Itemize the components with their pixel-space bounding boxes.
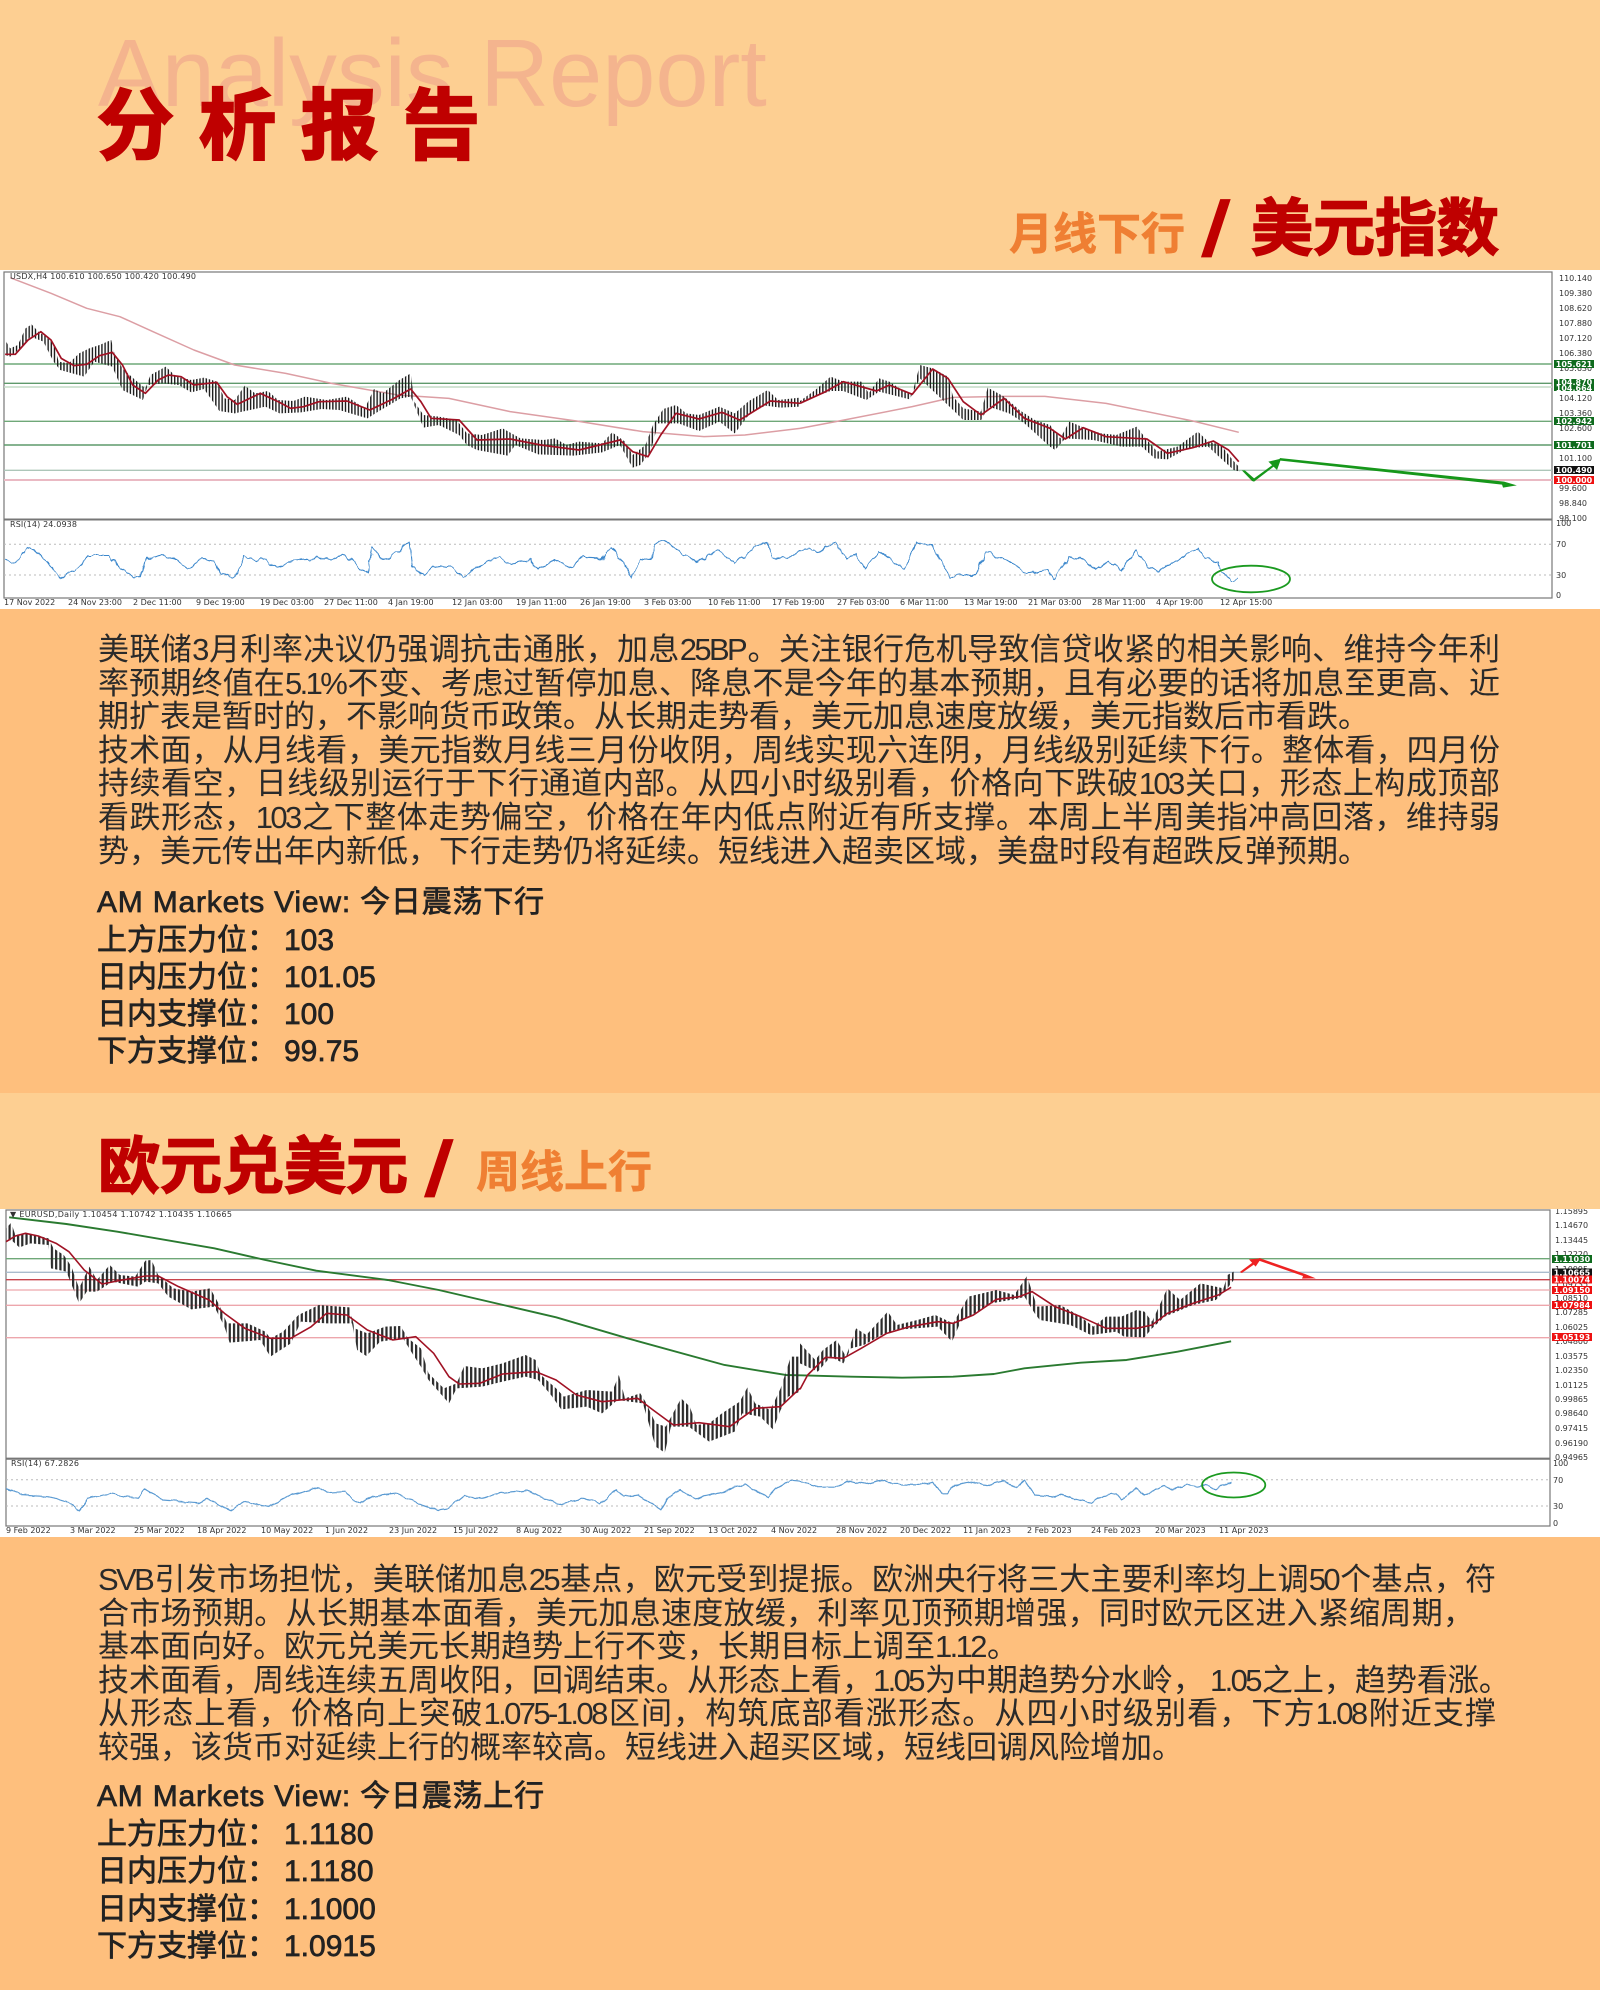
long moving average (9, 1217, 1231, 1378)
price axis labels: 100 (1553, 1459, 1568, 1468)
text block: USD index analysis: 持续看空，日线级别运行于下行通道内部。从四小时级别看，价格向下跌破103关口，形态上构成顶部 (98, 758, 1500, 803)
key levels: USD index: 99.75 (284, 1035, 359, 1068)
price axis labels: 70 (1556, 540, 1566, 549)
text block: EUR/USD analysis: 较强，该货币对延续上行的概率较高。短线进入超买区域，短线回调风险增加。 (98, 1722, 1183, 1767)
price axis labels: 98.840 (1559, 499, 1587, 508)
time axis labels: 10 May 2022 (261, 1526, 313, 1535)
price axis labels: 30 (1553, 1502, 1563, 1511)
time axis labels: 4 Nov 2022 (771, 1526, 817, 1535)
price axis labels: 105.630 (1559, 364, 1592, 373)
chart labels (10, 272, 196, 529)
time axis labels: 8 Aug 2022 (516, 1526, 562, 1535)
green ellipse highlight (1202, 1472, 1265, 1498)
price tags: 104.870 (1556, 378, 1593, 387)
text block: USD index analysis: 美联储3月利率决议仍强调抗击通胀，加息25BP。关注银行危机导致信贷收紧的相关影响、维持今年利 (98, 624, 1500, 669)
support and resistance lines (4, 364, 1552, 480)
chart labels: RSI(14) 24.0938 (10, 520, 77, 529)
time axis labels: 24 Nov 23:00 (68, 598, 122, 607)
price axis labels: 1.12220 (1555, 1250, 1588, 1259)
chart: EURUSD Daily (0, 1209, 1600, 1537)
key levels: USD index: 日内压力位： (97, 961, 277, 994)
long moving average (10, 278, 1239, 437)
price axis labels: 1.01125 (1555, 1381, 1588, 1390)
key levels: EUR/USD: 下方支撑位： (97, 1930, 277, 1962)
time axis labels: 17 Feb 19:00 (772, 598, 824, 607)
key levels: USD index (96, 886, 545, 1068)
price axis labels: 1.07285 (1555, 1308, 1588, 1317)
price tags: 1.07984 (1554, 1301, 1591, 1310)
time axis labels: 27 Dec 11:00 (324, 598, 378, 607)
time axis labels: 9 Dec 19:00 (196, 598, 245, 607)
short moving average (6, 1233, 1231, 1427)
candlesticks (6, 1223, 1234, 1453)
price axis labels: 100 (1556, 519, 1571, 528)
forecast arrows: green (1242, 458, 1517, 488)
key levels: EUR/USD: AM Markets View: 今日震荡上行 (97, 1780, 545, 1813)
price axis labels: 70 (1553, 1476, 1563, 1485)
price axis labels: 107.120 (1559, 334, 1592, 343)
price tags: 1.10074 (1554, 1276, 1591, 1284)
time axis labels: 21 Mar 03:00 (1028, 598, 1081, 607)
price tags (1552, 1255, 1592, 1342)
price tags: 1.10665 (1554, 1268, 1591, 1278)
time axis labels: 6 Mar 11:00 (900, 598, 948, 607)
price axis labels: 109.380 (1559, 289, 1592, 298)
time axis labels: 24 Feb 2023 (1091, 1526, 1141, 1535)
text block: USD index analysis (98, 624, 1500, 871)
price axis labels: 1.03575 (1555, 1352, 1588, 1361)
key levels: EUR/USD (96, 1780, 545, 1962)
time axis labels: 12 Apr 15:00 (1220, 598, 1272, 607)
key levels: EUR/USD: 日内压力位： (97, 1855, 277, 1888)
price axis labels: 99.600 (1559, 484, 1587, 493)
time axis labels: 23 Jun 2022 (389, 1526, 437, 1535)
time axis labels: 9 Feb 2022 (6, 1526, 51, 1535)
text block: USD index analysis: 率预期终值在5.1%不变、考虑过暂停加息、降息不是今年的基本预期，且有必要的话将加息至更高、近 (98, 658, 1500, 703)
time axis labels (4, 598, 1272, 607)
price axis labels: 108.620 (1559, 304, 1592, 313)
time axis labels: 2 Feb 2023 (1027, 1526, 1072, 1535)
support and resistance lines (6, 1259, 1550, 1338)
green ellipse highlight (1212, 566, 1290, 592)
time axis labels: 17 Nov 2022 (4, 598, 55, 607)
RSI line (6, 1479, 1231, 1511)
price axis labels: 104.120 (1559, 394, 1592, 403)
plot frame (4, 272, 1552, 598)
key levels: USD index: 日内支撑位： (97, 998, 277, 1031)
time axis labels: 2 Dec 11:00 (133, 598, 182, 607)
time axis labels: 11 Apr 2023 (1219, 1526, 1268, 1535)
price axis labels: 103.360 (1559, 409, 1592, 418)
slash separator: / (1199, 187, 1232, 272)
price axis labels: 0 (1556, 591, 1561, 600)
text block: USD index analysis: 期扩表是暂时的，不影响货币政策。从长期走势看，美元加息速度放缓，美元指数后市看跌。 (98, 691, 1369, 736)
time axis labels: 11 Jan 2023 (963, 1526, 1011, 1535)
key levels: EUR/USD: 1.0915 (284, 1930, 376, 1962)
time axis labels: 15 Jul 2022 (453, 1526, 498, 1535)
price axis labels: 1.13445 (1555, 1236, 1588, 1245)
text block: EUR/USD analysis: 合市场预期。从长期基本面看，美元加息速度放缓，利率见顶预期增强，同时欧元区进入紧缩周期， (98, 1588, 1474, 1633)
price axis labels: 101.100 (1559, 454, 1592, 463)
text block: USD index analysis: 技术面，从月线看，美元指数月线三月份收阴，周线实现六连阴，月线级别延续下行。整体看，四月份 (98, 725, 1500, 770)
time axis labels: 20 Dec 2022 (900, 1526, 951, 1535)
RSI line (5, 540, 1238, 580)
price tags: 100.490 (1556, 466, 1593, 475)
key levels: USD index: 下方支撑位： (97, 1035, 277, 1068)
price bars (5, 324, 1240, 472)
text block: EUR/USD analysis: SVB引发市场担忧，美联储加息25基点，欧元受到提振。欧洲央行将三大主要利率均上调50个基点，符 (98, 1554, 1496, 1599)
price axis labels: 102.600 (1559, 424, 1592, 433)
key levels: USD index: 101.05 (284, 961, 376, 994)
key levels: EUR/USD: 1.1000 (284, 1892, 376, 1926)
price axis labels: 1.09735 (1555, 1280, 1588, 1289)
section heading: 月线下行 / 美元指数 (1009, 178, 1500, 272)
panel: USD index analysis background (0, 609, 1600, 1093)
key levels: USD index: 100 (284, 998, 334, 1031)
time axis labels: 3 Feb 03:00 (644, 598, 691, 607)
price axis labels: 0.97415 (1555, 1424, 1588, 1433)
price axis labels: 0 (1553, 1519, 1558, 1528)
time axis labels: 19 Dec 03:00 (260, 598, 314, 607)
text block: EUR/USD analysis: 从形态上看，价格向上突破1.075-1.08区间，构筑底部看涨形态。从四小时级别看，下方1.08附近支撑 (98, 1688, 1496, 1733)
time axis labels: 13 Mar 19:00 (964, 598, 1017, 607)
price axis labels: 107.880 (1559, 319, 1592, 328)
time axis labels: 21 Sep 2022 (644, 1526, 695, 1535)
short moving average (5, 332, 1239, 462)
slash separator: / (422, 1127, 455, 1212)
heading: EUR/USD: 欧元兑美元 (98, 1116, 408, 1206)
price axis labels (1553, 1207, 1588, 1528)
main title: 分析报告: 分析报告 (97, 65, 505, 176)
time axis labels: 28 Nov 2022 (836, 1526, 887, 1535)
chart labels: USDX,H4 100.610 100.650 100.420 100.490 (10, 272, 196, 281)
price axis labels: 106.380 (1559, 349, 1592, 358)
plot frame (6, 1210, 1550, 1526)
price tags: 105.621 (1556, 360, 1593, 369)
price axis labels: 30 (1556, 571, 1566, 580)
price tags: 102.942 (1556, 417, 1592, 426)
time axis labels: 4 Apr 19:00 (1156, 598, 1203, 607)
price axis labels (1556, 274, 1592, 600)
time axis labels: 27 Feb 03:00 (837, 598, 889, 607)
chart labels: RSI(14) 67.2826 (11, 1459, 79, 1468)
price axis labels: 0.99865 (1555, 1395, 1588, 1404)
price axis labels: 1.04800 (1555, 1337, 1588, 1346)
chart labels: ▼ EURUSD,Daily 1.10454 1.10742 1.10435 1.10665 (10, 1210, 232, 1219)
text block: EUR/USD analysis: 基本面向好。欧元兑美元长期趋势上行不变，长期目标上调至1.12。 (98, 1621, 1018, 1666)
price axis labels: 110.140 (1559, 274, 1592, 283)
time axis labels: 19 Jan 11:00 (516, 598, 567, 607)
key levels: USD index: 上方压力位： (97, 924, 277, 956)
price tags: 104.664 (1556, 384, 1593, 393)
time axis labels: 28 Mar 11:00 (1092, 598, 1145, 607)
chart labels (10, 1210, 232, 1468)
heading: US dollar index: 美元指数 (1251, 178, 1499, 268)
subtitle: weekly up: 周线上行 (476, 1136, 652, 1200)
price axis labels: 0.94965 (1555, 1453, 1588, 1462)
price axis labels: 0.98640 (1555, 1409, 1588, 1418)
watermark heading: Analysis Report: Analysis Report (98, 21, 767, 127)
time axis labels: 1 Jun 2022 (325, 1526, 368, 1535)
RSI dotted levels (6, 1480, 1550, 1506)
key levels: EUR/USD: 日内支撑位： (97, 1892, 277, 1926)
price axis labels: 1.10995 (1555, 1265, 1588, 1274)
price tags: 101.701 (1556, 441, 1593, 450)
price tags (1554, 360, 1594, 485)
time axis labels: 18 Apr 2022 (197, 1526, 246, 1535)
subtitle: monthly down: 月线下行 (1009, 198, 1185, 262)
RSI dotted levels (4, 544, 1552, 575)
time axis labels: 20 Mar 2023 (1155, 1526, 1206, 1535)
price axis labels: 1.08510 (1555, 1294, 1588, 1303)
text block: USD index analysis: 势，美元传出年内新低，下行走势仍将延续。短线进入超卖区域，美盘时段有超跌反弹预期。 (98, 826, 1369, 871)
time axis labels: 10 Feb 11:00 (708, 598, 760, 607)
key levels: USD index: AM Markets View: 今日震荡下行 (97, 886, 545, 919)
price axis labels: 98.100 (1559, 514, 1587, 523)
price axis labels: 1.02350 (1555, 1366, 1588, 1375)
key levels: EUR/USD: 上方压力位： (97, 1818, 277, 1850)
section heading: 欧元兑美元 / 周线上行 (98, 1116, 652, 1212)
time axis labels: 13 Oct 2022 (708, 1526, 757, 1535)
key levels: EUR/USD: 1.1180 (284, 1855, 374, 1888)
price axis labels: 1.06025 (1555, 1323, 1588, 1332)
chart: USDX H4 (0, 270, 1600, 609)
time axis labels: 12 Jan 03:00 (452, 598, 503, 607)
price tags: 1.09150 (1554, 1286, 1591, 1295)
time axis labels: 3 Mar 2022 (70, 1526, 116, 1535)
panel: EUR/USD analysis background (0, 1537, 1600, 1990)
price axis labels: 0.96190 (1555, 1439, 1588, 1448)
key levels: EUR/USD: 1.1180 (284, 1818, 374, 1850)
price axis labels: 1.14670 (1555, 1221, 1588, 1230)
text block: EUR/USD analysis: 技术面看，周线连续五周收阳，回调结束。从形态上看，1.05为中期趋势分水岭， 1.05之上，趋势看涨。 (98, 1655, 1510, 1700)
price tags: 1.11030 (1554, 1255, 1591, 1264)
price tags: 100.000 (1556, 476, 1593, 485)
time axis labels: 4 Jan 19:00 (388, 598, 434, 607)
forecast arrows: red (1240, 1258, 1316, 1279)
price tags: 1.05193 (1554, 1333, 1590, 1342)
time axis labels (6, 1526, 1268, 1535)
text block: EUR/USD analysis (98, 1554, 1510, 1767)
text block: USD index analysis: 看跌形态，103之下整体走势偏空，价格在年内低点附近有所支撑。本周上半周美指冲高回落，维持弱 (98, 792, 1500, 837)
time axis labels: 25 Mar 2022 (134, 1526, 185, 1535)
key levels: USD index: 103 (284, 924, 334, 956)
time axis labels: 30 Aug 2022 (580, 1526, 631, 1535)
time axis labels: 26 Jan 19:00 (580, 598, 631, 607)
